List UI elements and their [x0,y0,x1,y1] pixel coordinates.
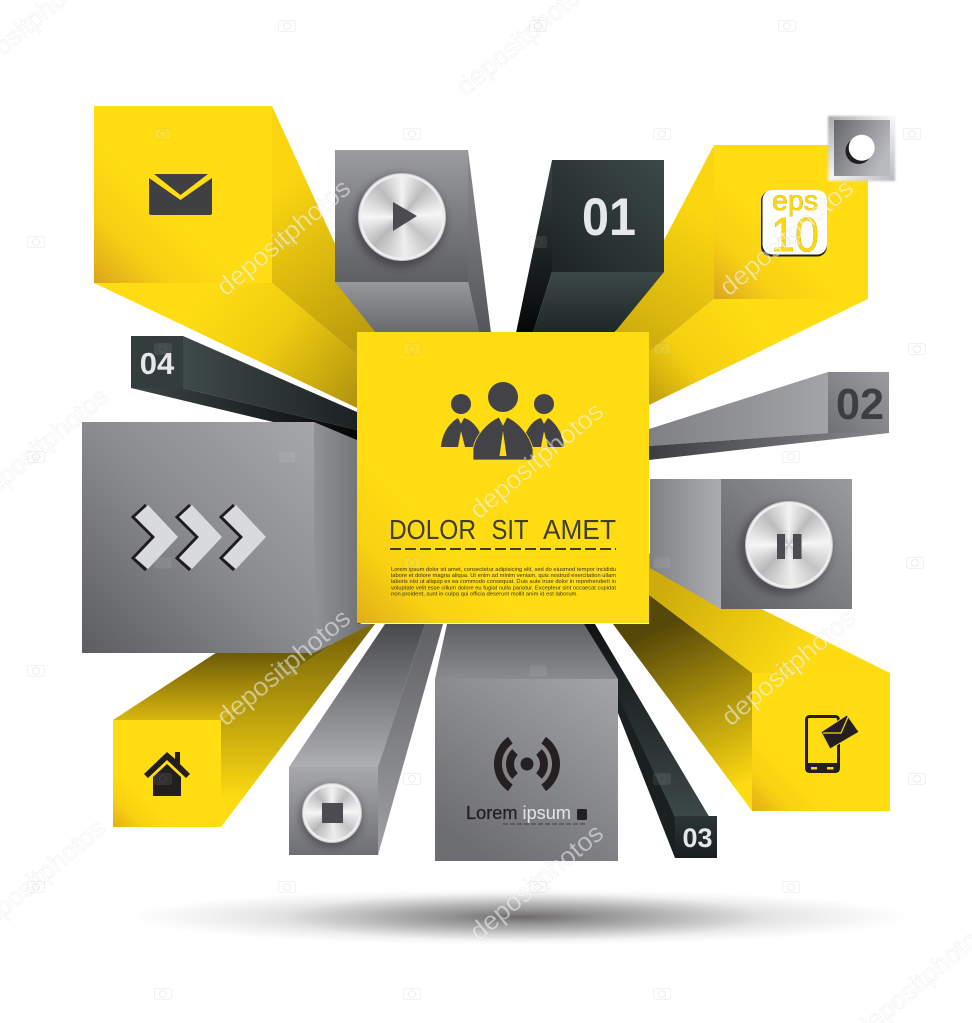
panel: grey block with signal logo [435,624,618,861]
panel: grey bar 02 [649,372,889,460]
body text: non proident, sunt in culpa qui officia deserunt mollit anim id est laborum. [391,592,578,598]
heading: SIT [492,514,529,545]
icon: phone with envelope [806,715,859,772]
tiny eps badge [577,809,587,820]
body text [391,567,617,598]
panel: dark bar 03 [583,624,717,858]
icon: small metal square with hole [828,116,895,181]
logo text: Lorem ipsum: Lorem ipsum [466,803,571,823]
body text: laboris nisi ut aliquip ex ea commodo consequat. Duis aute irure dolor in reprehenderit in [391,579,616,585]
body text: labore et dolore magna aliqua. Ut enim ad minim veniam, quis nostrud exercitation ullam [391,573,617,579]
panel: grey block with play button [335,150,491,333]
icon: home [144,752,190,796]
play button [358,173,446,261]
icon: envelope [149,174,212,215]
number 02: 02 [836,380,884,429]
watermark: depositphotos [715,603,861,732]
panel: large grey block with arrows [82,422,372,653]
watermark: depositphotos [713,173,859,302]
badge: eps 10: 10 [771,208,819,262]
panel: dark block 01 [516,160,664,333]
number 04: 04 [140,346,175,381]
stop button [302,783,362,843]
panel: bottom-right yellow bar with phone icon [613,553,890,811]
watermark: depositphotos [210,603,356,732]
body text: Lorem ipsum dolor sit amet, consectetur adipisicing elit, sed do eiusmod tempor incididu [391,567,616,573]
pause button [745,501,833,589]
icon: triple chevron [133,505,266,570]
watermark: depositphotos [463,818,609,947]
panel: dark bar 04 [131,336,357,442]
badge: eps 10 [761,185,827,262]
watermark: depositphotos [463,396,609,525]
body text: voluptate velit esse cillum dolore eu fugiat nulla pariatur. Excepteur sint occaecat cupidat [391,586,617,592]
icon: signal waves [498,740,556,788]
heading: AMET [543,514,616,545]
heading: DOLOR [389,514,476,545]
panel: top-left yellow block with mail icon [94,106,376,408]
panel: grey block with pause button [650,479,852,609]
panel: top-right yellow block with eps badge [615,145,868,405]
number 03: 03 [682,823,713,853]
badge: eps 10: eps [772,185,818,216]
heading [389,514,616,545]
panel: grey bar with stop button [289,624,443,855]
watermark: depositphotos [210,173,356,302]
panel: bottom-left yellow bar with home icon [113,598,375,827]
number 01: 01 [582,188,636,247]
ground shadow [128,889,912,945]
panel: central yellow card [357,332,649,623]
icon: three business people [441,382,564,460]
